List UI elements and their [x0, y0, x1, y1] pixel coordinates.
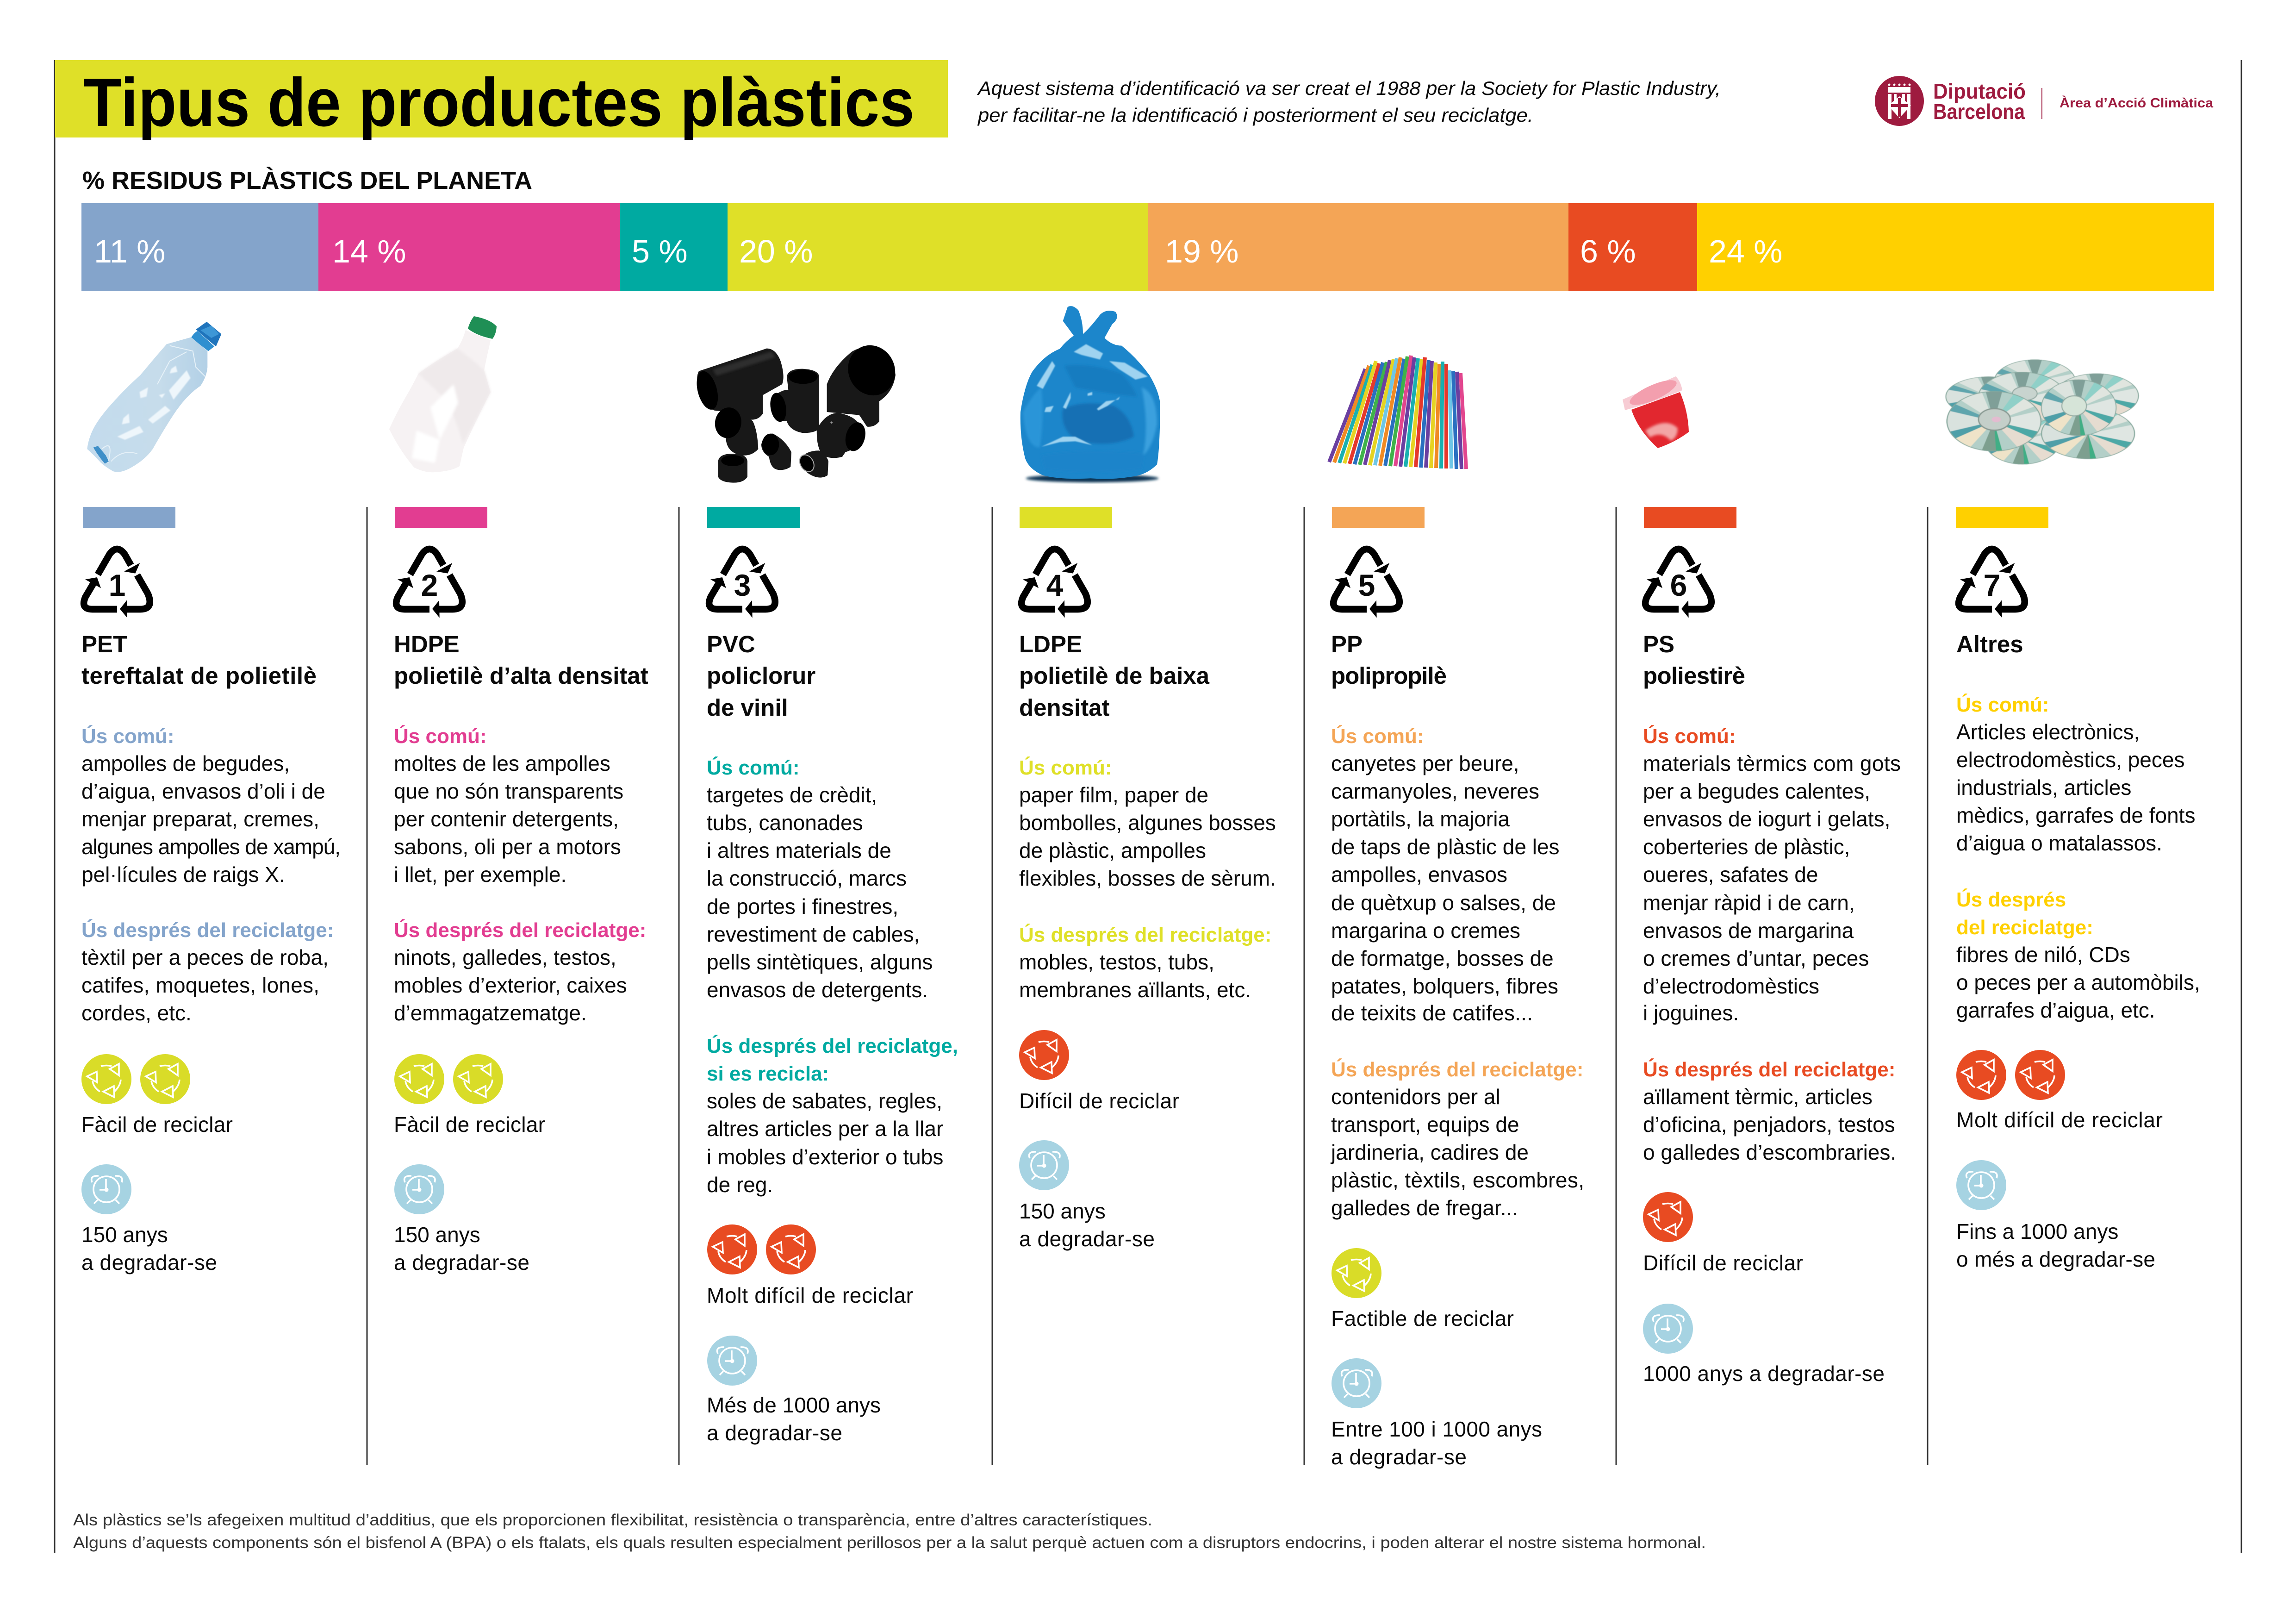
intro text [977, 77, 1721, 126]
after recycling: membranes aïllants, etc. [1019, 978, 1251, 1002]
after recycling: si es recicla: [707, 1062, 829, 1085]
common uses: tubs, canonades [707, 811, 863, 835]
common uses: d’aigua, envasos d’oli i de [81, 779, 325, 803]
after recycling: d’emmagatzematge. [394, 1001, 587, 1025]
plastic name [394, 631, 648, 689]
plastic name: PP [1331, 631, 1363, 657]
segment 11 %: 11 % [94, 233, 165, 269]
after recycling: fibres de niló, CDs [1956, 943, 2130, 967]
after recycling: Ús després del reciclatge: [394, 918, 646, 942]
common uses: de portes i finestres, [707, 894, 898, 918]
logo: Diputació Barcelona: Barcelona [1933, 100, 2025, 124]
common uses: menjar preparat, cremes, [81, 807, 319, 831]
common uses: bombolles, algunes bosses [1019, 811, 1276, 835]
plastic name [1331, 631, 1447, 689]
after recycling: soles de sabates, regles, [707, 1089, 942, 1113]
icon: clock [1019, 1140, 1069, 1190]
degradation time: a degradar-se [1331, 1445, 1467, 1469]
common uses: Ús comú: [394, 725, 486, 748]
segment 20 %: 20 % [739, 233, 813, 269]
segment 6 % [1568, 203, 1697, 291]
pipe: right elbow [817, 413, 868, 458]
icon: recycling code 7: 7 [1984, 568, 2000, 602]
after recycling: plàstic, tèxtils, escombres, [1331, 1168, 1584, 1192]
photo: colored straws [1329, 356, 1466, 469]
recyclability label: Factible de reciclar [1331, 1306, 1514, 1330]
footnote [73, 1511, 1706, 1552]
icon: hard to recycle [1019, 1030, 1069, 1080]
degradation time: a degradar-se [394, 1250, 529, 1274]
icon: very hard to recycle [1956, 1050, 2065, 1100]
after recycling: mobles d’exterior, caixes [394, 973, 627, 997]
icon: recycling code 6 [1645, 549, 1711, 618]
common uses: industrials, articles [1956, 775, 2131, 800]
icon: recycling code 1: 1 [109, 568, 125, 602]
plastic name: de vinil [707, 694, 788, 721]
after recycling: contenidors per al [1331, 1085, 1500, 1109]
common uses: i llet, per exemple. [394, 862, 566, 887]
segment 14 % [318, 203, 620, 291]
color tab [395, 507, 487, 528]
recyclability label: Fàcil de reciclar [81, 1112, 233, 1137]
degradation time: a degradar-se [707, 1421, 842, 1445]
common uses: coberteries de plàstic, [1643, 835, 1850, 859]
logo: Diputació Barcelona [1875, 76, 2214, 126]
common uses: i altres materials de [707, 838, 891, 862]
after recycling [1956, 888, 2200, 1022]
common uses: Ús comú: [1956, 693, 2049, 716]
plastic name: PVC [707, 631, 755, 657]
plastic name: PS [1643, 631, 1674, 657]
after recycling: transport, equips de [1331, 1112, 1519, 1137]
common uses: pel·lícules de raigs X. [81, 862, 285, 887]
after recycling [1330, 1058, 1584, 1220]
after recycling: o peces per a automòbils, [1956, 970, 2200, 994]
after recycling: i mobles d’exterior o tubs [707, 1145, 943, 1169]
segment 6 %: 6 % [1580, 233, 1636, 269]
common uses: de plàstic, ampolles [1019, 838, 1206, 862]
photo: PET bottle [87, 322, 221, 472]
common uses: paper film, paper de [1019, 783, 1208, 807]
common uses: algunes ampolles de xampú, [81, 835, 341, 859]
after recycling: galledes de fregar... [1331, 1196, 1518, 1220]
degradation time: 1000 anys a degradar-se [1643, 1362, 1885, 1386]
common uses [1956, 693, 2195, 855]
icon: recycling code 4 [1021, 549, 1088, 618]
recyclability label: Fàcil de reciclar [394, 1112, 545, 1137]
degradation time [1019, 1199, 1155, 1251]
common uses: electrodomèstics, peces [1956, 748, 2184, 772]
column 7: Altres [1956, 507, 2200, 1271]
degradation time: 150 anys [394, 1223, 480, 1247]
plastic name [1643, 631, 1745, 689]
common uses: menjar ràpid i de carn, [1643, 891, 1855, 915]
icon: easy to recycle [81, 1054, 190, 1104]
icon: hard to recycle [1643, 1192, 1693, 1242]
pipe: large tee [693, 349, 784, 420]
after recycling: garrafes d’aigua, etc. [1956, 998, 2155, 1022]
segment 11 % [81, 203, 318, 291]
degradation time [1331, 1417, 1542, 1469]
common uses: mèdics, garrafes de fonts [1956, 803, 2195, 827]
icon: clock [81, 1164, 131, 1214]
plastic name [1019, 631, 1210, 721]
common uses [1643, 725, 1901, 1025]
common uses: Articles electrònics, [1956, 720, 2140, 744]
icon: recycling code 5 [1333, 549, 1400, 618]
intro text: Aquest sistema d’identificació va ser creat el 1988 per la Society for Plastic Industry, [977, 77, 1721, 99]
plastic name: tereftalat de polietilè [81, 662, 317, 689]
color tab [1956, 507, 2048, 528]
stacked bar: % plastic waste [81, 203, 2214, 291]
segment 5 %: 5 % [632, 233, 688, 269]
common uses: margarina o cremes [1331, 918, 1520, 943]
common uses: d’aigua o matalassos. [1956, 831, 2162, 855]
pipe: medium tee [768, 369, 819, 433]
segment 24 %: 24 % [1709, 233, 1783, 269]
plastic name [81, 631, 317, 689]
after recycling: Ús després del reciclatge, [707, 1034, 958, 1057]
icon: recycling code 7 [1959, 549, 2025, 618]
color tab [1332, 507, 1425, 528]
icon: clock [1332, 1358, 1381, 1408]
after recycling: Ús després del reciclatge: [1019, 923, 1271, 946]
intro text: per facilitar-ne la identificació i posteriorment el seu reciclatge. [977, 104, 1533, 126]
common uses: materials tèrmics com gots [1643, 751, 1901, 775]
photo: PVC pipes [693, 337, 903, 483]
degradation time [394, 1223, 529, 1274]
after recycling: d’oficina, penjadors, testos [1643, 1112, 1895, 1137]
common uses: revestiment de cables, [707, 922, 920, 946]
after recycling [1019, 923, 1271, 1002]
after recycling: Ús després del reciclatge: [1331, 1058, 1583, 1081]
degradation time: a degradar-se [81, 1250, 217, 1274]
common uses [81, 725, 341, 887]
plastic name: polietilè de baixa [1019, 662, 1210, 689]
degradation time [707, 1393, 881, 1445]
common uses: envasos de margarina [1643, 918, 1854, 943]
icon: clock [1956, 1160, 2006, 1210]
common uses [707, 756, 933, 1002]
common uses: de quètxup o salses, de [1331, 891, 1556, 915]
color tab [1020, 507, 1112, 528]
column 1: PET [81, 507, 341, 1274]
after recycling: mobles, testos, tubs, [1019, 950, 1214, 974]
common uses: carmanyoles, neveres [1331, 779, 1539, 803]
common uses: targetes de crèdit, [707, 783, 877, 807]
after recycling: del reciclatge: [1956, 916, 2093, 939]
segment 5 % [620, 203, 728, 291]
plastic name: LDPE [1019, 631, 1082, 657]
after recycling: jardineria, cadires de [1330, 1140, 1529, 1164]
pipe: small cap [718, 454, 747, 483]
pipe: large elbow [827, 337, 903, 427]
pipe: small elbow [761, 434, 791, 470]
plastic name: Altres [1956, 631, 2023, 657]
after recycling: Ús després del reciclatge: [1643, 1058, 1895, 1081]
after recycling [394, 918, 646, 1025]
common uses: Ús comú: [1019, 756, 1112, 779]
common uses: canyetes per beure, [1331, 751, 1519, 775]
after recycling: altres articles per a la llar [707, 1117, 943, 1141]
plastic name: polietilè d’alta densitat [394, 662, 648, 689]
plastic name: densitat [1019, 694, 1110, 721]
recyclability label: Molt difícil de reciclar [707, 1283, 913, 1307]
plastic name: HDPE [394, 631, 460, 657]
recyclability label: Difícil de reciclar [1643, 1251, 1803, 1275]
plastic name: policlorur [707, 662, 815, 689]
common uses: per a begudes calentes, [1643, 779, 1870, 803]
icon: recycling code 5: 5 [1358, 568, 1375, 602]
photo: yoghurt cup [1623, 375, 1689, 448]
icon: recycling code 6: 6 [1670, 568, 1687, 602]
common uses: flexibles, bosses de sèrum. [1019, 866, 1276, 890]
logo: Diputació Barcelona: Diputació [1933, 79, 2026, 103]
segment 14 %: 14 % [332, 233, 406, 269]
common uses: moltes de les ampolles [394, 751, 610, 775]
after recycling: de reg. [707, 1173, 773, 1197]
icon: clock [394, 1164, 444, 1214]
after recycling: ninots, galledes, testos, [394, 945, 616, 969]
after recycling [707, 1034, 958, 1197]
column 2: HDPE [394, 507, 648, 1274]
segment 19 %: 19 % [1165, 233, 1239, 269]
degradation time [81, 1223, 217, 1274]
after recycling: cordes, etc. [81, 1001, 192, 1025]
common uses: i joguines. [1643, 1001, 1739, 1025]
degradation time: 150 anys [81, 1223, 168, 1247]
after recycling: Ús després [1956, 888, 2066, 911]
common uses: ampolles de begudes, [81, 751, 290, 775]
icon: recycling code 3: 3 [734, 568, 751, 602]
common uses: de teixits de catifes... [1331, 1001, 1533, 1025]
icon: recycling code 1 [84, 549, 150, 618]
after recycling [1643, 1058, 1896, 1164]
color tab [707, 507, 800, 528]
icon: feasible to recycle [1332, 1248, 1381, 1298]
common uses: Ús comú: [1643, 725, 1736, 748]
after recycling: o galledes d’escombraries. [1643, 1140, 1896, 1164]
common uses: ampolles, envasos [1331, 862, 1507, 887]
plastic name: polipropilè [1331, 662, 1447, 689]
icon: clock [1643, 1304, 1693, 1354]
common uses: oueres, safates de [1643, 862, 1818, 887]
title banner: Tipus de productes plàstics [83, 64, 915, 141]
segment 20 % [728, 203, 1148, 291]
common uses: d’electrodomèstics [1643, 974, 1819, 998]
pipe: ringed elbow [797, 450, 828, 478]
common uses: portàtils, la majoria [1331, 807, 1510, 831]
icon: very hard to recycle [707, 1224, 816, 1274]
color tab [83, 507, 175, 528]
degradation time [1956, 1219, 2155, 1271]
degradation time: 150 anys [1019, 1199, 1106, 1223]
common uses: Ús comú: [707, 756, 799, 779]
common uses: o cremes d’untar, peces [1643, 946, 1869, 970]
photo: HDPE bottle [389, 316, 497, 472]
column 5: PP [1330, 507, 1584, 1469]
icon: easy to recycle [394, 1054, 503, 1104]
segment 24 % [1697, 203, 2214, 291]
column 4: LDPE [1019, 507, 1276, 1251]
common uses: la construcció, marcs [707, 866, 907, 890]
common uses [394, 725, 623, 887]
icon: clock [707, 1336, 757, 1386]
footnote: Alguns d’aquests components són el bisfenol A (BPA) o els ftalats, els quals resulten especialment perillosos per a la salut perquè actuen com a disruptors endocrins, i poden alterar el nostre sistema hormonal. [73, 1534, 1706, 1552]
common uses: de taps de plàstic de les [1331, 835, 1560, 859]
common uses: Ús comú: [1331, 725, 1424, 748]
degradation time: a degradar-se [1019, 1227, 1155, 1251]
common uses: pells sintètiques, alguns [707, 950, 933, 974]
common uses: per contenir detergents, [394, 807, 619, 831]
degradation time: Entre 100 i 1000 anys [1331, 1417, 1542, 1441]
icon: recycling code 2: 2 [421, 568, 438, 602]
degradation time: Més de 1000 anys [707, 1393, 881, 1417]
footnote: Als plàstics se’ls afegeixen multitud d’additius, que els proporcionen flexibilitat, resistència o transparència, entre d’altres característiques. [73, 1511, 1152, 1529]
common uses [1331, 725, 1560, 1025]
icon: recycling code 2 [396, 549, 462, 618]
after recycling: tèxtil per a peces de roba, [81, 945, 329, 969]
photo: blue bag [1020, 306, 1160, 482]
photo: compact discs [1944, 358, 2140, 467]
after recycling: catifes, moquetes, lones, [81, 973, 319, 997]
common uses: envasos de iogurt i gelats, [1643, 807, 1890, 831]
plastic name: PET [81, 631, 127, 657]
pipe: left elbow [713, 406, 758, 456]
logo: Diputació Barcelona: Àrea d’Acció Climàtica [2060, 95, 2214, 111]
common uses: Ús comú: [81, 725, 174, 748]
common uses: que no són transparents [394, 779, 623, 803]
after recycling [81, 918, 334, 1025]
icon: recycling code 4: 4 [1046, 568, 1064, 602]
degradation time: Fins a 1000 anys [1956, 1219, 2118, 1243]
segment 19 % [1148, 203, 1568, 291]
plastic name: poliestirè [1643, 662, 1745, 689]
icon: recycling code 3 [709, 549, 775, 618]
column 6: PS [1643, 507, 1901, 1386]
recyclability label: Molt difícil de reciclar [1956, 1108, 2163, 1132]
common uses: sabons, oli per a motors [394, 835, 621, 859]
common uses: envasos de detergents. [707, 978, 928, 1002]
common uses [1019, 756, 1276, 890]
plastic name [707, 631, 815, 721]
common uses: de formatge, bosses de [1331, 946, 1554, 970]
common uses: patates, bolquers, fibres [1331, 974, 1558, 998]
color tab [1644, 507, 1736, 528]
degradation time: o més a degradar-se [1956, 1247, 2155, 1271]
after recycling: Ús després del reciclatge: [81, 918, 334, 942]
recyclability label: Difícil de reciclar [1019, 1089, 1179, 1113]
after recycling: aïllament tèrmic, articles [1643, 1085, 1873, 1109]
heading: % residus: % RESIDUS PLÀSTICS DEL PLANETA [82, 167, 532, 194]
column 3: PVC [707, 507, 958, 1445]
